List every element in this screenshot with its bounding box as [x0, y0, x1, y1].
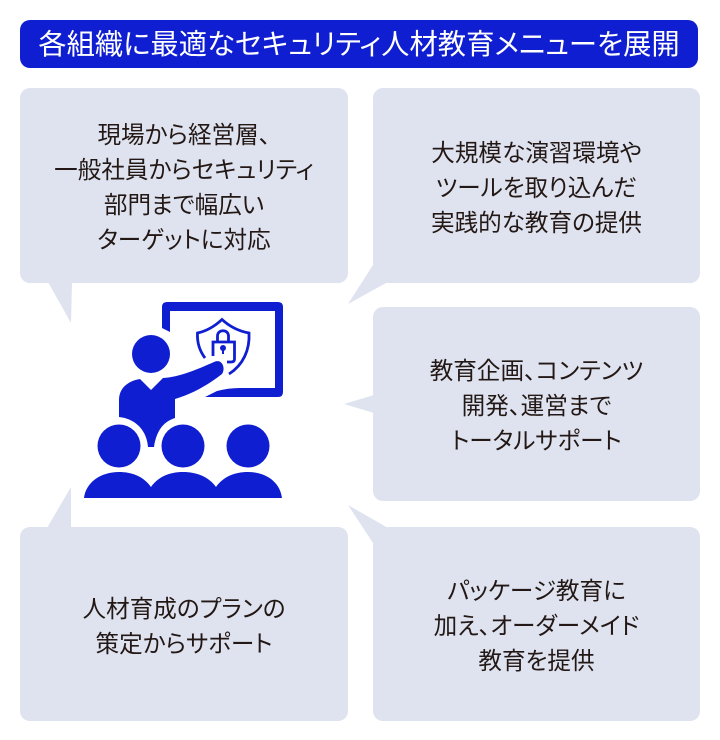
- panel: practical education: [373, 88, 700, 283]
- icon: audience: [84, 424, 282, 498]
- panel: practical education: 実践的な教育の提供: [431, 210, 642, 236]
- panel: target audience: 一般社員からセキュリティ: [54, 158, 314, 184]
- panel: practical education: ツールを取り込んだ: [436, 176, 637, 202]
- panel: practical education: 大規模な演習環境や: [431, 140, 642, 166]
- panel: package and custom education: パッケージ教育に: [447, 579, 626, 605]
- panel: plan formulation: 人材育成のプランの: [83, 596, 285, 622]
- panel: total support: [373, 307, 700, 501]
- title: 各組織に最適なセキュリティ人材教育メニューを展開: [38, 28, 680, 60]
- panel: target audience: 現場から経営層、: [97, 123, 271, 149]
- panel: target audience: [20, 88, 348, 283]
- panel: total support: トータルサポート: [451, 429, 622, 455]
- panel: package and custom education: 教育を提供: [478, 649, 595, 675]
- icon: presentation board: [162, 302, 283, 397]
- panel: package and custom education: [373, 527, 700, 721]
- icon: instructor: [119, 361, 224, 447]
- panel: target audience: ターゲットに対応: [97, 228, 271, 254]
- panel: plan formulation: [20, 527, 348, 721]
- title: [20, 20, 698, 68]
- panel: package and custom education: 加え、オーダーメイド: [434, 614, 639, 640]
- panel: target audience: 部門まで幅広い: [104, 193, 264, 219]
- panel: plan formulation: 策定からサポート: [96, 632, 272, 658]
- panel: total support: 開発、運営まで: [462, 394, 611, 420]
- icon: security shield with padlock: [197, 320, 249, 374]
- panel: total support: 教育企画、コンテンツ: [430, 359, 643, 385]
